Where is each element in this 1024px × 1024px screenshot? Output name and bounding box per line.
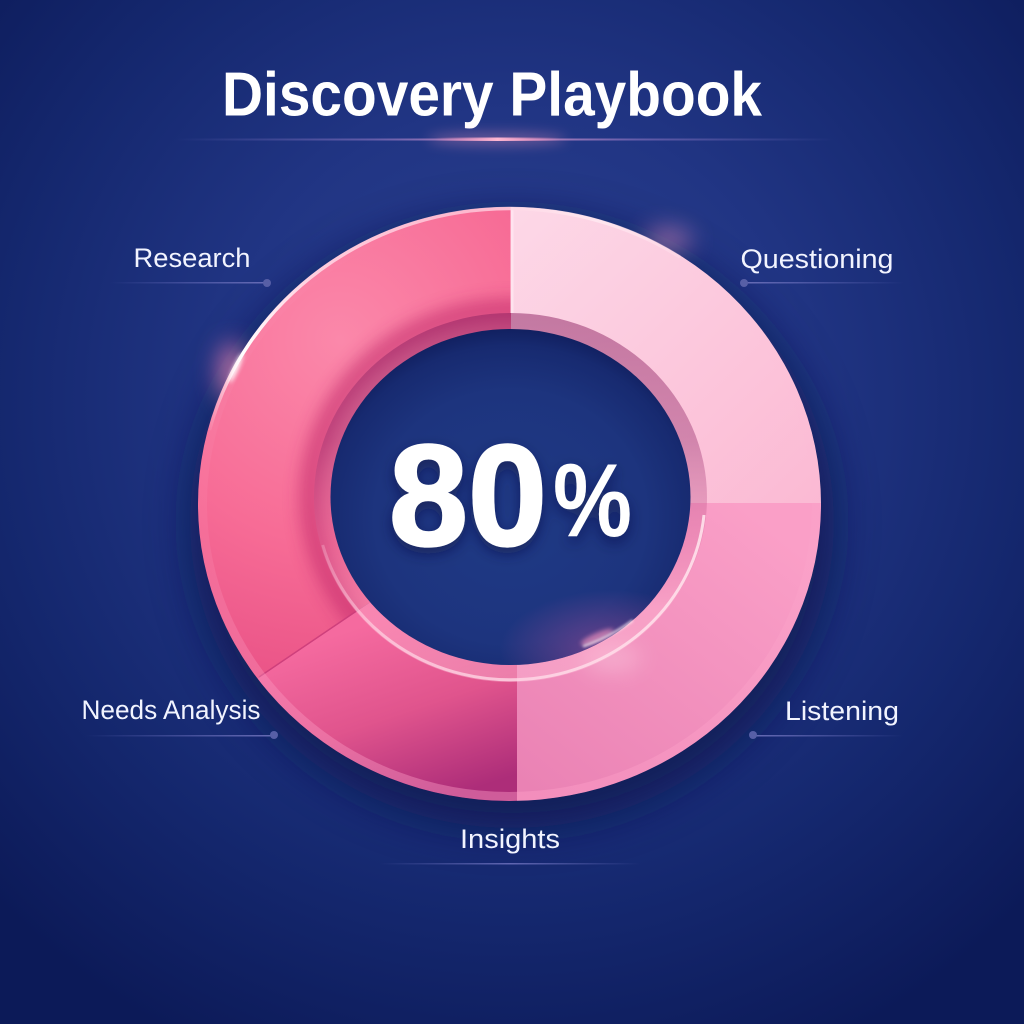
title underline <box>175 132 835 146</box>
label: Needs Analysis <box>82 695 278 739</box>
rim highlight arc <box>210 208 680 430</box>
label: Needs Analysis: Needs Analysis <box>82 695 260 725</box>
segment: Listening <box>517 503 830 810</box>
center value: % <box>553 443 632 559</box>
label: Research <box>110 243 271 287</box>
inner highlight ring <box>323 515 704 680</box>
flare: inner bottom <box>584 621 632 646</box>
segment: Questioning <box>511 190 830 503</box>
title: Discovery Playbook <box>222 60 762 130</box>
ring segments <box>198 207 821 801</box>
glint upper left <box>227 352 245 384</box>
rim band <box>201 540 800 801</box>
center value: 80 <box>389 415 547 576</box>
label: Listening: Listening <box>785 696 899 726</box>
inner bevel ring <box>314 313 707 682</box>
donut chart <box>100 190 834 828</box>
label: Questioning <box>740 244 904 287</box>
glow: rim upper right <box>644 228 692 252</box>
glow: listening inner <box>582 646 642 670</box>
label: Questioning: Questioning <box>740 244 894 274</box>
label: Listening <box>749 696 903 739</box>
segment: Research <box>198 207 511 678</box>
label: Insights: Insights <box>460 824 560 854</box>
segment divider lower left <box>259 610 358 677</box>
centre hole <box>330 329 690 665</box>
donut shadow <box>190 216 834 828</box>
segment: Needs Analysis / Insights <box>258 602 517 801</box>
label: Research: Research <box>134 243 250 273</box>
segment divider top <box>510 207 514 313</box>
center value <box>389 415 632 576</box>
glow: rim upper left <box>218 342 246 402</box>
hole tint lower right <box>511 596 651 664</box>
